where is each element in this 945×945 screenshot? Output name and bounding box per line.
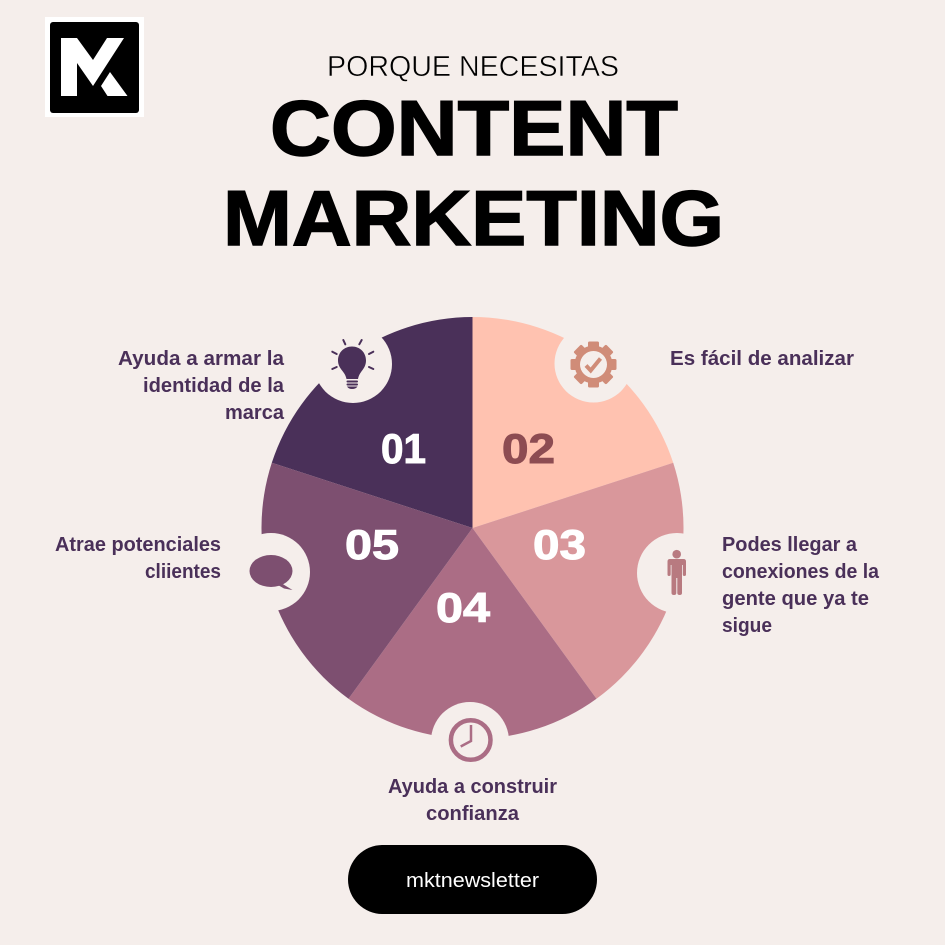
number 04: 04 — [436, 584, 491, 631]
button: mktnewsletter: mktnewsletter — [406, 870, 539, 892]
number 05: 05 — [345, 521, 399, 568]
segment 05 — [261, 463, 472, 699]
notches — [232, 324, 717, 780]
text: easy to analyze: Es fácil de analizar — [670, 348, 854, 370]
text: identity: identidad de la — [143, 375, 285, 397]
number 01: 01 — [381, 425, 426, 472]
subtitle: PORQUE NECESITAS — [327, 51, 619, 83]
title: content marketing: CONTENT — [270, 84, 678, 172]
logo: MK — [45, 17, 144, 117]
text: identity: marca — [225, 402, 285, 424]
text: reach connections — [722, 534, 880, 637]
icon: speech bubble — [250, 555, 292, 590]
icon: gear with check — [570, 342, 616, 388]
text: reach connections: Podes llegar a — [722, 534, 858, 556]
text: attract clients — [55, 534, 221, 583]
segment 01 — [272, 317, 472, 528]
text: build trust — [388, 776, 557, 825]
title: content marketing: MARKETING — [223, 174, 724, 262]
title: content marketing — [223, 84, 724, 262]
text: identity — [118, 348, 285, 424]
segment 03 — [472, 463, 684, 699]
text: build trust: Ayuda a construir — [388, 776, 557, 798]
icon: light bulb — [332, 340, 373, 389]
text: build trust: confianza — [426, 803, 520, 825]
icon: clock — [451, 720, 491, 760]
text: reach connections: sigue — [722, 615, 772, 637]
number 03: 03 — [533, 521, 586, 568]
number 02: 02 — [502, 425, 555, 472]
pie chart — [232, 317, 717, 780]
text: reach connections: conexiones de la — [722, 561, 880, 583]
text: reach connections: gente que ya te — [722, 588, 869, 610]
button: mktnewsletter — [348, 845, 597, 914]
text: attract clients: cliientes — [145, 561, 221, 583]
segment 04 — [348, 528, 596, 739]
icon: person — [668, 550, 686, 595]
text: identity: Ayuda a armar la — [118, 348, 285, 370]
text: attract clients: Atrae potenciales — [55, 534, 221, 556]
segment 02 — [472, 317, 673, 528]
